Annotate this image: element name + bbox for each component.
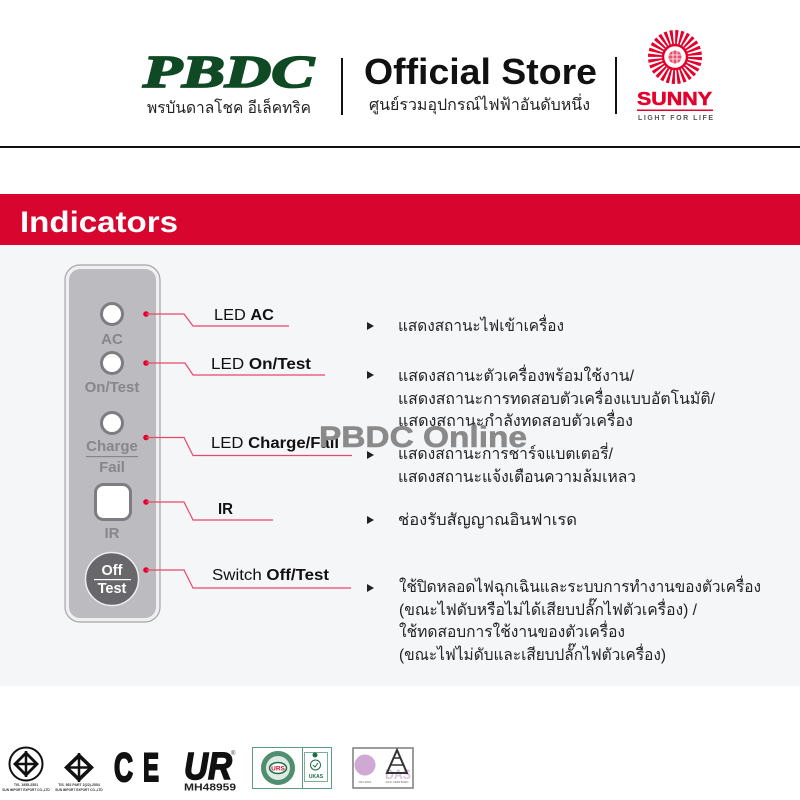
switch Off/Test: Test	[98, 581, 127, 597]
logo: PBDC	[142, 47, 315, 117]
LED AC	[101, 304, 123, 348]
description: Switch Off/Test: (ขณะไฟดับหรือไม่ได้เสียบปลั๊กไฟตัวเครื่อง) /	[399, 598, 698, 619]
IR sensor: IR	[104, 525, 120, 542]
mark: CE	[114, 746, 159, 790]
switch Off/Test: Off	[102, 563, 123, 579]
callout: Switch Off/Test	[143, 567, 351, 588]
LED Charge/Fail: Charge	[86, 438, 138, 455]
description: LED Charge/Fail: แสดงสถานะแจ้งเตือนความล้มเหลว	[398, 468, 636, 486]
logo: SUNNY: LIGHT FOR LIFE	[638, 115, 713, 122]
callout: IR	[143, 499, 273, 520]
mark: ISO DAS: ISO 9001	[359, 780, 372, 784]
IR sensor	[96, 484, 130, 542]
mark: UR MH48959: UR	[184, 746, 232, 788]
mark: ISO DAS: DAS	[385, 766, 411, 782]
heading: Official Store	[364, 51, 597, 115]
mark: ISO DAS	[353, 748, 413, 788]
LED On/Test: On/Test	[85, 379, 139, 396]
callout: LED On/Test: LED On/Test	[211, 356, 311, 373]
panel: indicators background	[0, 245, 800, 686]
mark: TIS diamond	[55, 753, 103, 792]
description: LED On/Test: แสดงสถานะตัวเครื่องพร้อมใช้งาน/	[398, 364, 635, 385]
description: LED On/Test	[367, 364, 716, 430]
certification marks	[2, 746, 413, 794]
mark: TIS circle: SUN IMPORT EXPORT CO.,LTD	[2, 788, 50, 792]
mark: CE: E	[143, 746, 159, 790]
mark: ISO DAS: DAS CERTIFIED	[386, 780, 409, 784]
description: Switch Off/Test: ใช้ปิดหลอดไฟฉุกเฉินและระบบการทำงานของตัวเครื่อง	[399, 575, 761, 597]
logo: PBDC: พรบันดาลโชค อีเล็คทริค	[147, 97, 311, 117]
description: LED Charge/Fail	[367, 442, 636, 486]
mark: URS UKAS	[252, 748, 332, 788]
switch Off/Test	[86, 552, 138, 606]
callout: IR: IR	[218, 501, 233, 518]
heading: Official Store: Official Store	[364, 51, 597, 92]
mark: TIS circle: TIS. 1955-2551	[14, 783, 38, 787]
description: Switch Off/Test	[367, 575, 761, 664]
mark: UR MH48959: ®	[231, 750, 236, 757]
watermark: PBDC Online: PBDC Online	[319, 421, 527, 454]
description: Switch Off/Test: (ขณะไฟไม่ดับและเสียบปลั๊กไฟตัวเครื่อง)	[399, 643, 666, 664]
mark: TIS diamond: TIS. 952 PART 2(22)-2554	[58, 783, 100, 787]
mark: UR MH48959: MH48959	[184, 782, 237, 794]
description: LED AC: แสดงสถานะไฟเข้าเครื่อง	[398, 314, 564, 335]
LED Charge/Fail	[86, 412, 138, 476]
mark: URS UKAS: UKAS	[309, 774, 324, 780]
callout: LED Charge/Fail: LED Charge/Fail	[211, 435, 339, 452]
mark: CE: C	[114, 746, 133, 790]
heading band: Indicators: Indicators	[20, 206, 178, 239]
header: brand logos	[142, 37, 713, 122]
description: LED On/Test: แสดงสถานะกำลังทดสอบตัวเครื่อง	[398, 409, 633, 430]
callout: Switch Off/Test: Switch Off/Test	[212, 567, 329, 584]
callout: LED AC	[143, 307, 289, 326]
LED Charge/Fail: Fail	[99, 459, 125, 476]
callout: LED On/Test	[143, 356, 325, 375]
heading band: Indicators	[0, 194, 800, 245]
description: Switch Off/Test: ใช้ทดสอบการใช้งานของตัวเครื่อง	[399, 620, 625, 641]
logo: PBDC: PBDC	[142, 47, 315, 97]
callout: LED AC: LED AC	[214, 307, 274, 324]
mark: TIS circle	[2, 748, 50, 792]
mark: TIS diamond: SUN IMPORT EXPORT CO.,LTD	[55, 788, 103, 792]
description: IR: ช่องรับสัญญาณอินฟาเรด	[398, 512, 577, 529]
logo: SUNNY: SUNNY	[637, 89, 712, 109]
description: LED On/Test: แสดงสถานะการทดสอบตัวเครื่องแบบอัตโนมัติ/	[398, 387, 716, 408]
description: LED AC	[367, 314, 564, 335]
device front panel	[65, 265, 160, 622]
mark: URS UKAS: URS	[271, 766, 286, 772]
LED AC: AC	[101, 331, 123, 348]
logo: SUNNY	[637, 37, 713, 122]
description: LED Charge/Fail: แสดงสถานะการชาร์จแบตเตอรี่/	[398, 442, 614, 463]
heading: Official Store: ศูนย์รวมอุปกรณ์ไฟฟ้าอันดับหนึ่ง	[369, 93, 590, 115]
LED On/Test	[85, 352, 139, 396]
callout: LED Charge/Fail	[143, 435, 352, 456]
